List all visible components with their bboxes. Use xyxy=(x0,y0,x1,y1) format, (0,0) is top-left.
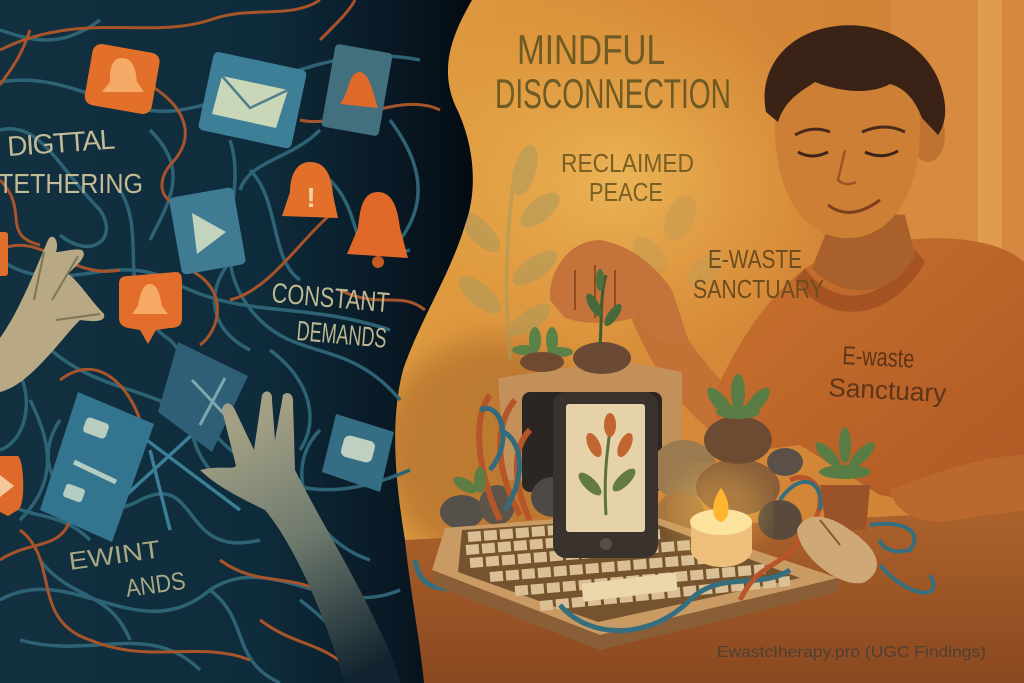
icon: faded background plant right xyxy=(627,190,730,293)
cables over keyboard xyxy=(560,570,790,631)
title xyxy=(495,26,731,117)
label: e-waste sanctuary xyxy=(693,244,824,304)
label: constant demands xyxy=(270,277,391,354)
shirt xyxy=(712,238,1024,510)
hand: upper left xyxy=(0,237,104,392)
stones and colored cables xyxy=(415,395,934,593)
old computer monitor shrine xyxy=(498,327,682,492)
keyboard xyxy=(432,512,838,650)
label: constant demands: DEMANDS xyxy=(295,315,388,354)
label: e-waste sanctuary: SANCTUARY xyxy=(693,274,824,304)
title: DISCONNECTION xyxy=(495,70,731,117)
label: endless hands: ANDS xyxy=(124,567,187,603)
alert: exclamation bell xyxy=(282,162,338,218)
tangled cables xyxy=(0,20,420,683)
succulent left of keyboard xyxy=(451,467,486,497)
succulent on stones xyxy=(703,374,774,464)
smartphone with plant xyxy=(553,392,658,558)
label: endless hands: EWINT xyxy=(67,535,162,576)
neck xyxy=(812,210,915,290)
notification: bell middle xyxy=(119,272,182,344)
shirt text: Sanctuary xyxy=(828,372,947,408)
face xyxy=(775,58,920,238)
person xyxy=(632,25,1024,522)
ear xyxy=(911,108,945,162)
forearm on table xyxy=(890,455,1024,522)
card: small message xyxy=(322,414,394,492)
collar xyxy=(795,250,925,312)
shirt text: E-waste xyxy=(842,340,915,374)
alert: exclamation bell: ! xyxy=(306,182,316,213)
label: constant demands: CONSTANT xyxy=(270,277,391,318)
label: digital tethering: TETHERING xyxy=(0,168,143,199)
notification fragment left top xyxy=(0,232,8,276)
card: envelope xyxy=(198,51,307,149)
candle xyxy=(675,470,765,567)
table xyxy=(405,510,1024,683)
label: e-waste sanctuary: E-WASTE xyxy=(708,244,802,274)
hand planting sprout xyxy=(550,240,690,345)
source credit: EwastcIherapy.pro (UGC Findings) xyxy=(717,644,986,661)
card: bell on slate xyxy=(321,44,393,136)
succulent on monitor xyxy=(512,327,573,357)
stone and sprout xyxy=(573,342,631,374)
card: message document xyxy=(40,392,154,542)
title: MINDFUL xyxy=(517,26,665,73)
alert: large bell xyxy=(347,192,408,268)
hand: lower right xyxy=(200,391,400,683)
eyes and brows xyxy=(795,127,905,135)
label: reclaimed peace xyxy=(561,148,694,207)
label: reclaimed peace: PEACE xyxy=(589,177,663,207)
potted plant xyxy=(812,427,878,530)
icon: faded background plant left xyxy=(453,142,565,360)
arm xyxy=(632,280,735,440)
label: endless hands xyxy=(67,535,187,603)
label: reclaimed peace: RECLAIMED xyxy=(561,148,694,178)
card: play xyxy=(169,187,246,275)
shirt text xyxy=(828,340,947,408)
label: digital tethering: DIGTTAL xyxy=(6,124,116,162)
computer mouse xyxy=(797,517,877,583)
card: crossed screen xyxy=(158,342,248,452)
label: digital tethering xyxy=(0,124,143,199)
notification fragment left bottom xyxy=(0,456,23,516)
hair xyxy=(765,25,945,135)
notification: bell top xyxy=(83,43,161,115)
panel: dark digital chaos xyxy=(0,0,473,683)
nose and smile xyxy=(838,150,856,184)
